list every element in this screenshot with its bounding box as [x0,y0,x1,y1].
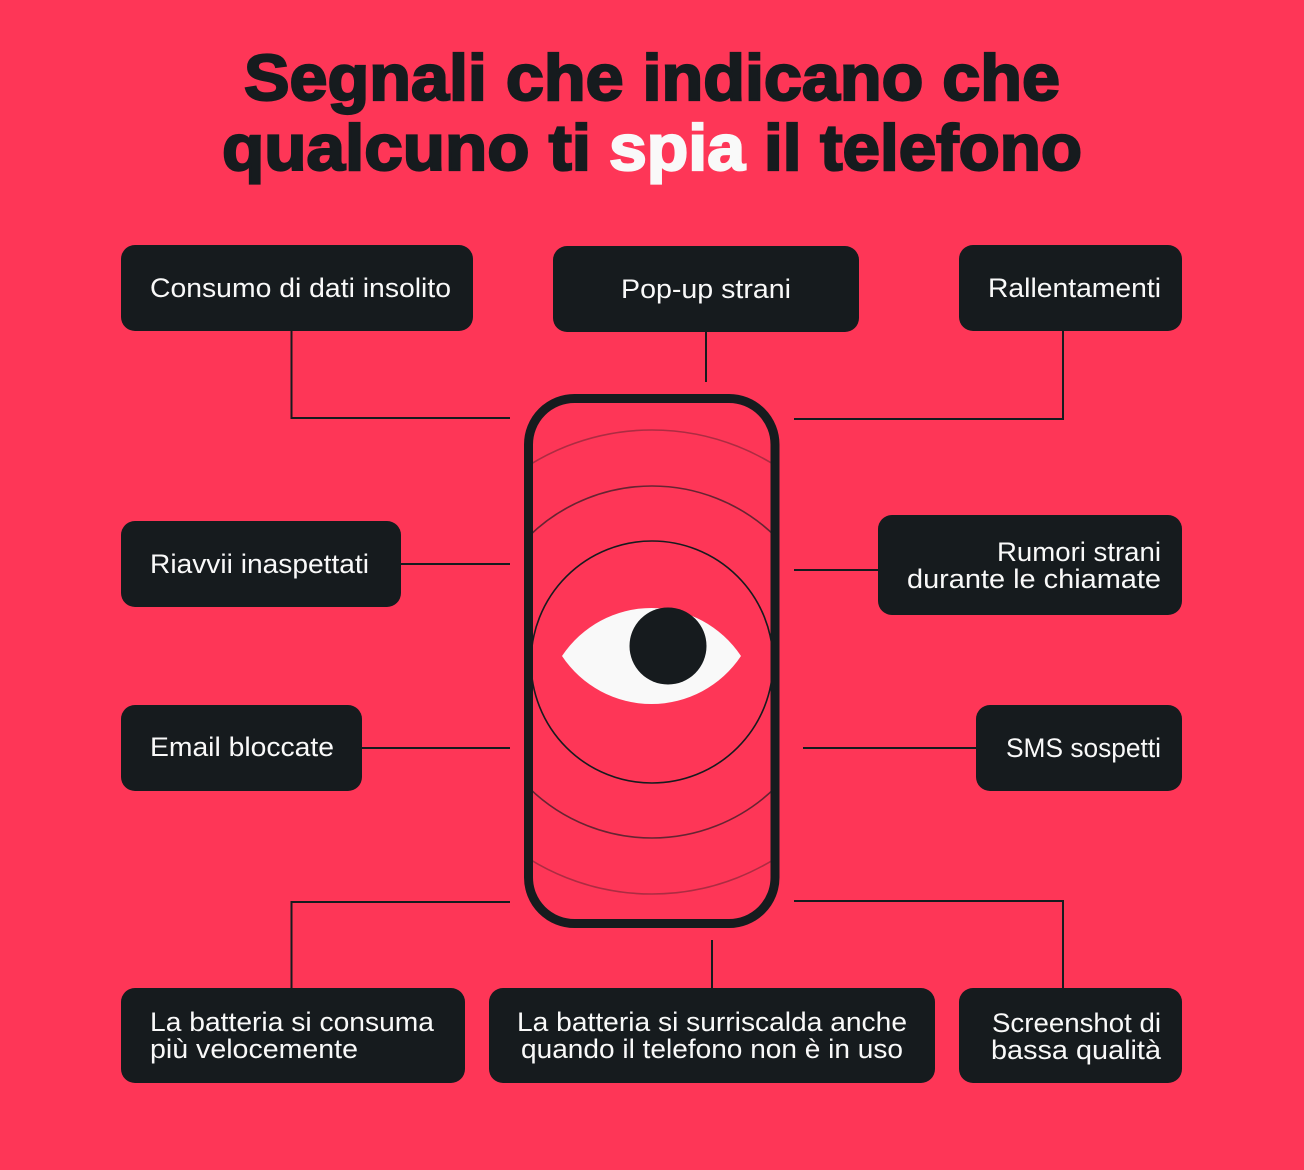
title: Segnali che indicano che [244,41,1060,114]
label: Rallentamenti [959,245,1182,331]
label: La batteria si surriscalda anche quando il telefono non è in uso: quando il telefono non è in uso [521,1034,903,1064]
label: Riavvii inaspettati [121,521,401,607]
label: Rumori strani durante le chiamate: durante le chiamate [907,564,1161,594]
label: La batteria si consuma più velocemente: più velocemente [150,1034,358,1064]
label: Pop-up strani [553,246,859,332]
title: qualcuno ti [222,111,591,184]
label: Riavvii inaspettati: Riavvii inaspettati [150,549,369,579]
phone with eye illustration [524,394,780,928]
icon: eye [562,608,741,704]
label: Screenshot di bassa qualità: bassa qualità [991,1035,1161,1065]
label: SMS sospetti: SMS sospetti [1006,733,1161,763]
label: La batteria si surriscalda anche quando il telefono non è in uso [489,988,935,1083]
title [222,41,1082,184]
label: La batteria si surriscalda anche quando il telefono non è in uso: La batteria si surriscalda anche [517,1007,907,1037]
label: Email bloccate: Email bloccate [150,732,334,762]
connector lines [292,331,1063,988]
label: Rumori strani durante le chiamate [878,515,1182,615]
label: Email bloccate [121,705,362,791]
label: Screenshot di bassa qualità: Screenshot di [992,1008,1161,1038]
radar circles [533,429,770,895]
label: Pop-up strani: Pop-up strani [621,274,791,304]
label: Screenshot di bassa qualità [959,988,1182,1083]
title: spia [609,111,746,184]
title: il telefono [764,111,1082,184]
label: La batteria si consuma più velocemente: La batteria si consuma [150,1007,434,1037]
label: Consumo di dati insolito: Consumo di dati insolito [150,273,451,303]
label: Rallentamenti: Rallentamenti [988,273,1161,303]
label: SMS sospetti [976,705,1182,791]
phone outline [528,398,775,924]
label: La batteria si consuma più velocemente [121,988,465,1083]
label: Consumo di dati insolito [121,245,473,331]
label: Rumori strani durante le chiamate: Rumori strani [997,537,1161,567]
